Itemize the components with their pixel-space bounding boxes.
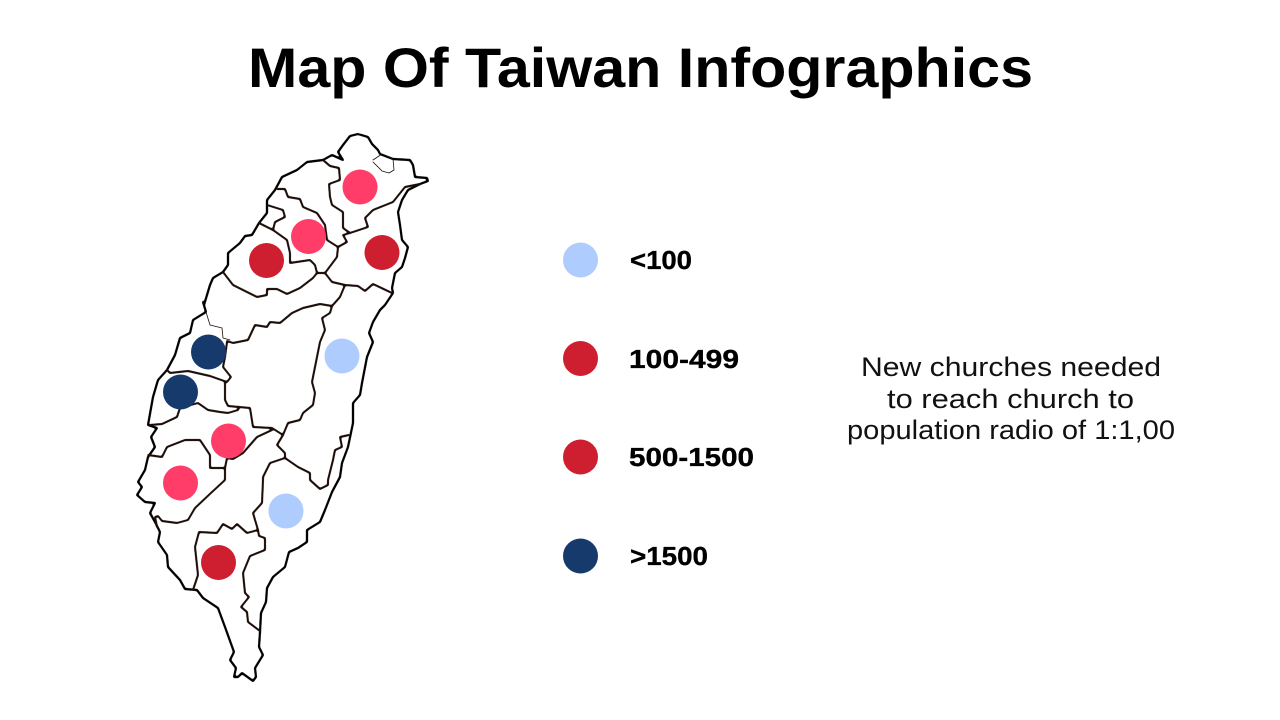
title: Map Of Taiwan Infographics bbox=[248, 36, 1033, 99]
description text: to reach church to bbox=[887, 384, 1134, 414]
legend item: over 1500: >1500 bbox=[630, 541, 708, 571]
legend item: 500-1500: 500-1500 bbox=[629, 442, 754, 472]
legend item: 500-1500 bbox=[563, 440, 754, 474]
legend bbox=[563, 242, 754, 574]
description text: population radio of 1:1,00 bbox=[847, 415, 1175, 445]
island outline bbox=[137, 134, 428, 681]
legend item: under 100 bbox=[563, 242, 692, 278]
map of Taiwan bbox=[137, 134, 428, 681]
description text bbox=[847, 352, 1175, 445]
legend item: 100-499: 100-499 bbox=[629, 344, 739, 374]
legend item: 100-499 bbox=[563, 341, 739, 376]
map markers bbox=[163, 170, 400, 580]
thin boundaries: reservoir and Changhua line bbox=[206, 154, 394, 340]
legend item: under 100: <100 bbox=[630, 245, 692, 275]
legend item: over 1500 bbox=[563, 538, 708, 574]
county boundaries bbox=[148, 160, 420, 631]
description text: New churches needed bbox=[861, 352, 1161, 382]
